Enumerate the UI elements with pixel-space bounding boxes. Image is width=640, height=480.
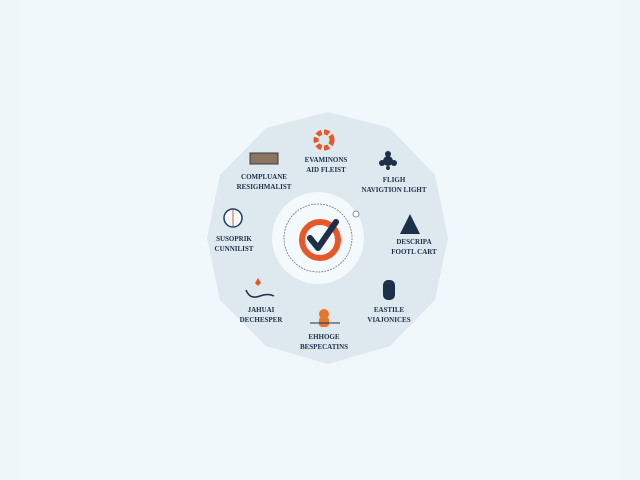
label: left [214,235,254,253]
label: bottom-right: EASTILE [374,306,404,314]
label: bottom [300,333,348,351]
label: bottom: EHHOGE [308,333,340,341]
label: top: AID FLEIST [306,166,346,174]
icon: figure [310,309,340,327]
label: left: SUSOPRIK [216,235,252,243]
icon: capsule [383,280,395,300]
label: bottom: BESPECATINS [300,343,348,351]
label: right [391,238,437,256]
label: right: DESCRIPA [396,238,432,246]
icon: lifebuoy [316,132,332,148]
label: top-right [361,176,427,194]
label: bottom-left: JAHUAI [248,306,274,314]
label: bottom-right: VIAJONICES [367,316,411,324]
icon: flower [379,151,397,170]
label: top [304,156,347,174]
label: top-right: NAVIGTION LIGHT [361,186,427,194]
label: top-left: COMPLUANE [241,173,287,181]
icon: document [250,153,278,164]
label: top: EVAMINONS [305,156,347,164]
icon: tent [400,214,420,234]
label: bottom-left: DECHESPER [240,316,282,324]
icon: ship [246,278,274,297]
center badge [272,192,364,284]
label: top-right: FLIGH [383,176,405,184]
label: bottom-right [367,306,411,324]
label: left: CUNNILIST [215,245,253,253]
panel: dodecagon [207,112,448,364]
label: top-left [236,173,292,191]
label: bottom-left [240,306,282,324]
icon: globe [224,209,242,227]
label: top-left: RESIGHMALIST [237,183,291,191]
label: right: FOOTL CART [391,248,437,256]
